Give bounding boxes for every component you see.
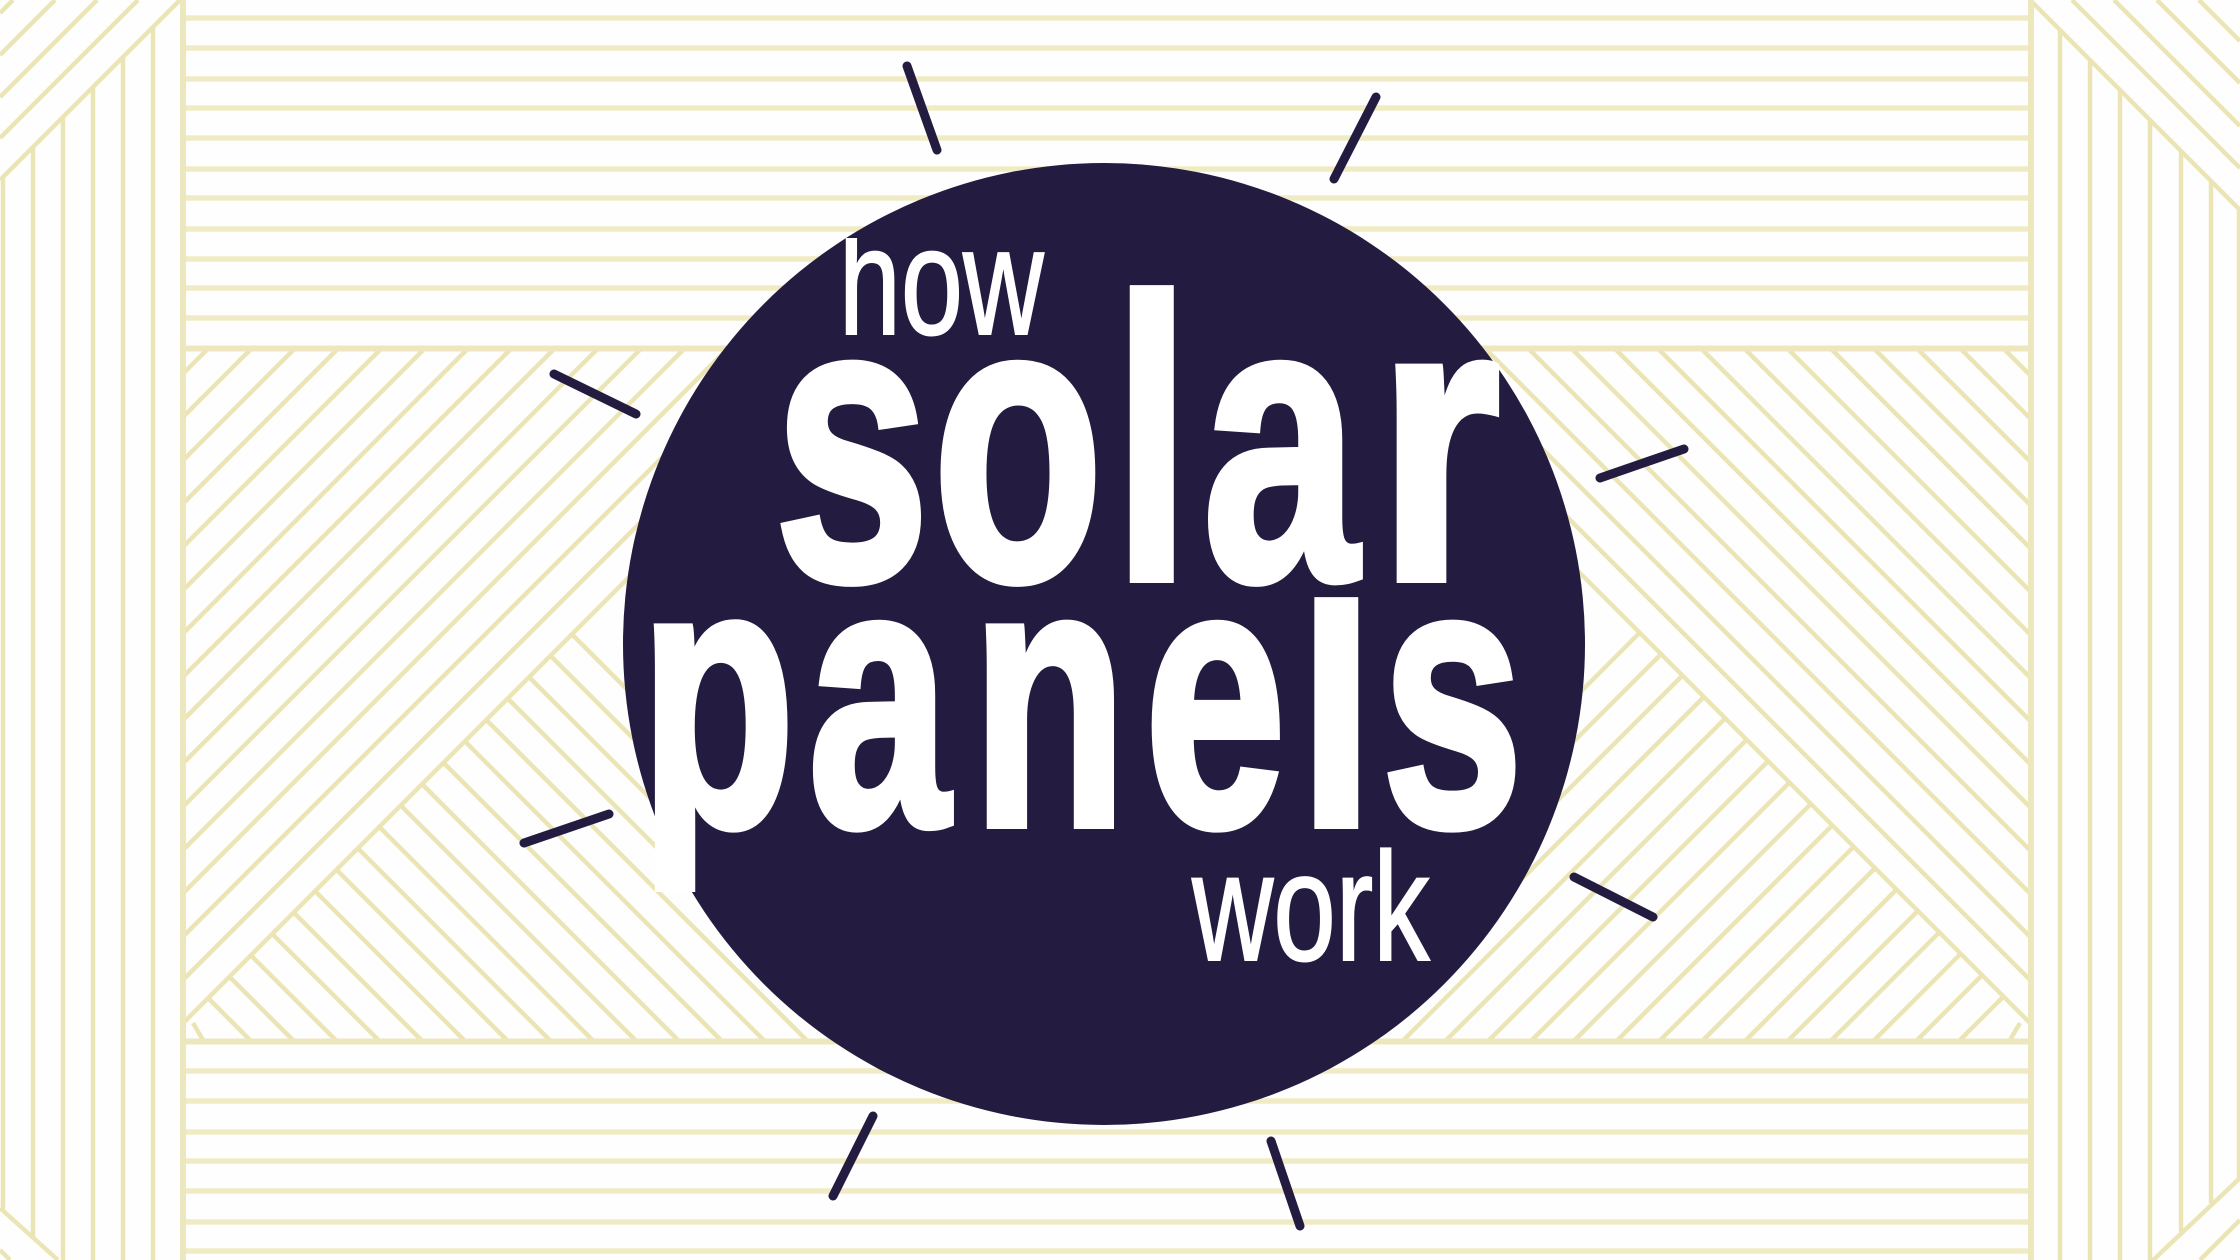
title word: panels [654, 597, 1516, 892]
title word: panels: l [1292, 539, 1381, 897]
icon: sun rays [524, 66, 1684, 1226]
title word: work: work [1191, 821, 1430, 993]
icon: sun disc [623, 163, 1585, 1125]
panel: left inner triangle stripes [193, 634, 979, 1041]
title [654, 238, 1516, 962]
panel: right border pattern [2030, 0, 2240, 1260]
panel: left border pattern [0, 0, 180, 1260]
title word: panels: s [1382, 486, 1523, 905]
panel: right diagonal stripes [1356, 349, 2031, 1024]
panel: bottom horizontal stripes [183, 1071, 2031, 1251]
title word: solar: r [1378, 218, 1501, 664]
panel: top horizontal stripes [183, 18, 2031, 318]
title word: how: how [839, 197, 1045, 367]
title word: solar: sola [774, 218, 1360, 665]
panel: left diagonal stripes [183, 349, 857, 1023]
panel: right inner triangle stripes [1231, 634, 2020, 1041]
title word: panels: pane [640, 486, 1286, 907]
